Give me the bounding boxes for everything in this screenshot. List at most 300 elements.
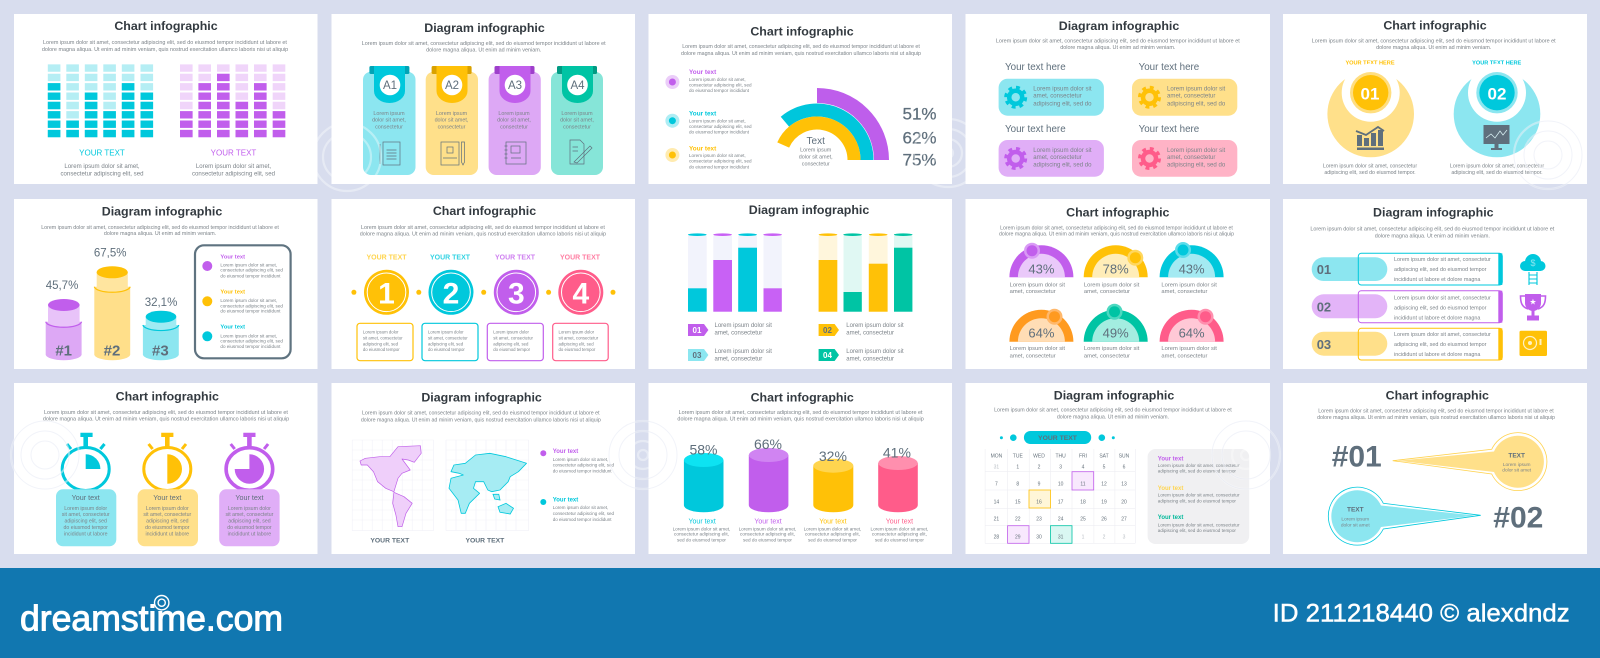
box: pink gear: amet, consectetur [1167,154,1215,161]
step 4: 4 [572,277,589,310]
intro text: dolore magna aliqua. Ut enim ad minim veniam, quis nostrud exercitation ullamco laboris nisi ut aliquip [42,47,288,53]
box: purple gear: Lorem ipsum dolor sit [1033,147,1092,154]
calendar header pill: YOUR TEXT [1038,435,1078,442]
circle 01: YOUR TEXT HERE [1345,60,1395,66]
step 2: do eiusmod tempor [428,347,465,352]
chart: left tubes [688,233,782,312]
cylinder 32%: 32% [819,448,847,464]
tag 01: Lorem ipsum dolor sit [714,323,772,329]
chart: cyan level bars [54,64,147,137]
intro text: Lorem ipsum dolor sit amet, consectetur adipiscing elit, sed do eiusmod tempor incididunt ut labore et [679,410,923,416]
stopwatch: cyan quarter [56,433,116,546]
chart: purple level bars [186,64,279,137]
stopwatch: yellow half: do eiusmod tempor [145,525,190,531]
card A3: Lorem ipsum [498,111,530,117]
legend box: Your text [220,289,245,295]
row 02: 02 [1317,300,1331,315]
notes box: Your text [1158,486,1183,492]
percent values: 51% [902,104,937,123]
calendar grid: 18 [1080,499,1086,505]
watermark spiral tint [11,121,1582,489]
tag 02: amet, consectetur [846,330,894,336]
calendar grid: 26 [1101,517,1107,523]
stopwatch: cyan quarter: adipiscing elit, sed [65,518,107,524]
calendar grid: 1 [1082,534,1085,540]
calendar grid: 8 [1016,482,1019,488]
legend item: cyan: consectetur adipiscing elit, sed [689,124,752,129]
intro text: dolore magna aliqua. Ut enim ad minim veniam, quis nostrud exercitation ullamco laboris nisi ut aliquip [1317,415,1555,421]
calendar grid: 3 [1123,534,1126,540]
intro text: Lorem ipsum dolor sit amet, consectetur adipiscing elit, sed do eiusmod tempor incididunt ut labore et [44,410,288,416]
watermark spirals [11,119,1582,489]
legend item: cyan [540,498,614,522]
card A4: Lorem ipsum [561,111,593,117]
calendar grid: 24 [1058,517,1064,523]
cylinder 58%: Your text [689,518,716,525]
calendar grid: WED [1033,454,1045,460]
intro text: dolore magna aliqua. Ut enim ad minim veniam. [104,231,216,237]
tag 03: amet, consectetur [714,357,762,363]
heading: Chart infographic [114,19,218,33]
gauge 64% orange: amet, consectetur [1010,354,1056,360]
icon: signed paper [570,140,592,164]
gauge 64% orange: 64% [1028,326,1055,341]
calendar grid: 13 [1121,482,1127,488]
callout: yellow: TEXT [1508,452,1525,459]
stopwatch: cyan quarter: sit amet, consectetur [62,512,110,518]
calendar grid: 2 [1103,534,1106,540]
row 01: adipiscing elit, sed do eiusmod tempor [1394,267,1487,273]
panel: world maps [332,383,635,554]
stopwatch: purple three quarters: incididunt ut labore [228,532,271,538]
label: purple chart: YOUR TEXT [211,149,256,158]
label: purple chart: Lorem ipsum dolor sit amet, [196,163,271,170]
circle 02: Lorem ipsum dolor sit amet, consectetur [1450,163,1544,169]
circle 02 [1450,60,1544,176]
panel: calendar [966,383,1270,554]
card A2: dolor sit amet, [435,118,469,124]
intro text: dolore magna aliqua. Ut enim ad minim veniam. [1375,233,1490,239]
tag 02: 02 [823,326,832,335]
calendar grid: 3 [1059,464,1062,470]
intro text: dolore magna aliqua. Ut enim ad minim veniam, quis nostrud exercitation ullamco laboris nisi ut aliquip [360,231,606,237]
gauge 49% teal: amet, consectetur [1084,354,1130,360]
card A2: Lorem ipsum [436,111,467,117]
intro text: dolore magna aliqua. Ut enim ad minim veniam. [1060,45,1176,51]
card A2 [426,66,478,175]
notes box: adipiscing elit, sed do eiusmod tempor [1158,469,1236,474]
cylinder #2: #2 [104,343,120,360]
stopwatch: yellow half: sit amet, consectetur [143,512,191,518]
step 2: adipiscing elit, sed [428,341,464,346]
stopwatch: purple three quarters: Lorem ipsum dolor [228,506,271,512]
intro text: Lorem ipsum dolor sit amet, consectetur adipiscing elit, sed do eiusmod tempor incididunt ut labore et [1000,225,1233,231]
legend item: yellow: Your text [689,146,717,153]
box: yellow gear [1132,62,1237,116]
panel: bar grid chart [14,14,318,184]
stopwatch: yellow half: incididunt ut labore [146,532,189,538]
legend item: yellow: Lorem ipsum dolor sit amet, [689,153,746,158]
tag 04: Lorem ipsum dolor sit [846,349,904,355]
heading: Diagram infographic [424,21,545,35]
cylinder 41%: 41% [883,445,911,461]
stopwatch: cyan quarter: incididunt ut labore [64,532,108,538]
calendar grid [985,449,1135,543]
circle 02: adipiscing elit, sed do eiusmod tempor. [1451,170,1543,176]
gauge 64% pink [1160,309,1224,360]
legend box: do eiusmod tempor incididunt [220,344,281,349]
tag 01: amet, consectetur [714,330,762,336]
stopwatch: purple three quarters [219,433,280,546]
calendar grid: 31 [994,464,999,470]
callout: cyan: TEXT [1347,507,1364,514]
legend item: cyan: Lorem ipsum dolor sit amet, [553,505,608,510]
legend item: cyan: do eiusmod tempor incididunt [689,129,750,134]
gauge 64% orange [1009,309,1073,360]
cylinder 66%: consectetur adipiscing elit, [740,532,795,537]
legend item: yellow [665,146,752,169]
label: cyan chart: YOUR TEXT [79,149,125,158]
calendar header pill [1000,431,1115,444]
notes box: adipiscing elit, sed do eiusmod tempor [1158,499,1236,504]
gauge 43% purple: 43% [1028,261,1055,276]
notes box: Lorem ipsum dolor sit amet, consectetur [1158,463,1240,468]
label: cyan chart: Lorem ipsum dolor sit amet, [64,163,140,170]
step 1: Lorem ipsum dolor [363,330,398,335]
heading: Chart infographic [1066,206,1170,220]
chart centre label: dolor sit amet, [799,155,833,161]
icon: trophy: ★ [1529,298,1537,306]
step 2 [422,254,478,361]
cylinder 66%: sed do eiusmod tempor [743,537,792,542]
stopwatch: cyan quarter: Lorem ipsum dolor [64,506,107,512]
cylinder 58%: consectetur adipiscing elit, [674,532,729,537]
calendar grid: 5 [1103,464,1106,470]
panel: pointer callouts [1283,383,1587,554]
notes box: Lorem ipsum dolor sit amet, consectetur [1158,522,1240,527]
calendar grid: SAT [1099,454,1109,460]
legend item: purple [665,69,752,93]
gauge 43% cyan: amet, consectetur [1161,289,1208,295]
row 03: Lorem ipsum dolor sit amet, consectetur [1394,332,1491,338]
legend item: purple: do eiusmod tempor incididunt [553,468,612,473]
stopwatch: purple three quarters: sit amet, consectetur [225,512,274,518]
callout: yellow: Lorem ipsum [1503,463,1531,468]
legend box: consectetur adipiscing elit, sed [220,268,283,273]
row 01: incididunt ut labore et dolore magna [1394,277,1481,283]
calendar grid: 16 [1036,499,1042,505]
legend box: Your text [220,254,245,260]
row 02: adipiscing elit, sed do eiusmod tempor [1394,305,1487,311]
gauge 64% pink: Lorem ipsum dolor sit [1161,346,1217,352]
heading: Diagram infographic [1054,388,1174,402]
calendar grid: MON [991,454,1003,460]
gauge 43% cyan: Lorem ipsum dolor sit [1161,282,1217,288]
callout: cyan: Lorem ipsum [1341,518,1369,523]
card A4 [551,66,603,175]
stopwatch: yellow half: adipiscing elit, sed [146,518,189,524]
gauge 78% yellow: 78% [1103,261,1129,276]
legend box: Your text [220,325,245,331]
panel: bookmark cards [332,14,635,184]
circle 01: Lorem ipsum dolor sit amet, consectetur [1323,163,1417,169]
calendar grid: 31 [1058,534,1064,540]
notes box [1148,449,1249,544]
box: pink gear: Lorem ipsum dolor sit [1167,147,1225,154]
calendar grid: 6 [1123,464,1126,470]
box: cyan gear: adipiscing elit, sed do [1033,100,1092,107]
box: yellow gear: amet, consectetur [1167,93,1215,100]
gauge 78% yellow [1084,245,1148,295]
calendar grid: 2 [1038,464,1041,470]
cylinder 41%: Lorem ipsum dolor sit amet, [870,526,928,531]
card A4: A4 [570,80,585,92]
card A2: A2 [445,80,459,92]
row 03: incididunt ut labore et dolore magna [1394,352,1481,358]
step 4: adipiscing elit, sed [558,341,594,346]
panel: semicircle gauges [966,199,1270,369]
tag 04: 04 [823,351,832,360]
legend box: Lorem ipsum dolor sit amet, [220,263,277,268]
gauge 43% cyan: 43% [1179,261,1205,276]
intro text: Lorem ipsum dolor sit amet, consectetur adipiscing elit, sed do eiusmod tempor incididunt ut labore et [1318,409,1554,415]
image id: ID 211218440 © alexdndz [1273,600,1570,628]
intro text: Lorem ipsum dolor sit amet, consectetur adipiscing elit, sed do eiusmod tempor incididunt ut labore et [682,44,920,50]
calendar grid: TUE [1013,454,1023,460]
intro text: Lorem ipsum dolor sit amet, consectetur adipiscing elit, sed do eiusmod tempor incididunt ut labore et [1312,39,1556,45]
calendar grid: 7 [995,482,998,488]
panel: numbered circles [1283,14,1587,184]
legend box: consectetur adipiscing elit, sed [220,303,283,308]
box: pink gear: adipiscing elit, sed do [1167,162,1226,168]
cylinder 41%: Your text [886,518,913,525]
gauge 49% teal: Lorem ipsum dolor sit [1084,346,1139,352]
percent values: 75% [902,151,937,170]
calendar grid: 17 [1058,499,1064,505]
heading: Diagram infographic [102,205,222,219]
tag 04 [819,349,904,363]
footer band [0,568,1600,658]
step 3: do eiusmod tempor [493,347,531,352]
cylinder 32%: Lorem ipsum dolor sit amet, [804,526,861,531]
connector dots [351,290,616,295]
card A3 [489,66,541,175]
legend item: purple: Your text [689,69,717,76]
label: cyan chart: consectetur adipiscing elit, sed [60,171,144,178]
step 2: YOUR TEXT [430,254,471,261]
percent values [902,104,937,170]
heading: Chart infographic [750,25,854,39]
tag 02: Lorem ipsum dolor sit [846,323,904,329]
cylinder 66% [739,436,796,542]
tag 03 [688,349,772,363]
heading: Diagram infographic [749,203,869,217]
calendar grid: 21 [994,517,999,523]
cylinder #3: 32,1% [145,297,177,309]
row 01: Lorem ipsum dolor sit amet, consectetur [1394,257,1491,263]
icon: trophy [1520,294,1546,320]
heading: Chart infographic [751,391,854,405]
panel: cylinder chart [648,383,952,554]
intro text: dolore magna aliqua. Ut enim ad minim veniam. [1057,414,1169,420]
calendar grid: 22 [1015,517,1021,523]
row 02: Lorem ipsum dolor sit amet, consectetur [1394,295,1491,301]
legend box [195,245,291,358]
card A4: consectetur [563,124,591,130]
row 03: 03 [1317,337,1331,352]
cylinder 41% [870,445,928,542]
cylinder 58%: 58% [689,441,718,457]
step 3: Lorem ipsum dolor [493,330,529,335]
box: yellow gear: Your text here [1139,62,1200,73]
notes box: Your text [1158,515,1183,521]
step 4: do eiusmod tempor [558,347,596,352]
box: pink gear: Your text here [1139,124,1200,135]
cylinder #1: #1 [55,343,72,360]
box: cyan gear: Lorem ipsum dolor sit [1033,86,1092,93]
circle 01: 01 [1361,84,1379,103]
gauge 49% teal: 49% [1103,326,1129,341]
card A3: A3 [508,80,522,92]
step 2: 2 [443,277,459,310]
label: cyan chart [60,149,144,178]
callout: cyan: dolor sit amet [1341,523,1370,529]
stopwatch: cyan quarter: Your text [72,493,100,502]
heading: Diagram infographic [1373,206,1494,220]
legend item: purple: do eiusmod tempor incididunt [689,88,750,93]
gauge 43% purple [1009,243,1073,295]
box: cyan gear [999,62,1104,116]
cylinder 58%: Lorem ipsum dolor sit amet, [673,526,730,531]
step 3 [487,254,543,361]
heading: Chart infographic [433,204,536,218]
cylinder #2 [94,248,130,360]
gauge 43% cyan [1160,242,1224,295]
legend item: purple [540,449,614,473]
cylinder #1: 45,7% [46,280,78,292]
legend item: cyan: consectetur adipiscing elit, sed [553,511,614,516]
legend box: Lorem ipsum dolor sit amet, [220,298,277,303]
cylinder 32% [804,448,861,542]
stopwatch: purple three quarters: adipiscing elit, sed [228,518,271,524]
number #01: #01 [1332,441,1382,474]
label: purple chart [192,149,275,178]
row 02: incididunt ut labore et dolore magna [1394,315,1481,321]
step 1: YOUR TEXT [366,254,407,261]
gauge 64% orange: Lorem ipsum dolor sit [1010,346,1065,352]
intro text: Lorem ipsum dolor sit amet, consectetur adipiscing elit, sed do eiusmod tempor incididunt ut labore et [361,225,605,231]
legend item: cyan: Lorem ipsum dolor sit amet, [689,119,746,124]
calendar grid: 28 [994,534,999,540]
panel: rainbow arc chart [648,14,952,184]
row 02 [1312,291,1502,323]
intro text: dolore magna aliqua. Ut enim ad minim veniam. [1376,45,1492,51]
map: Eurasia, Africa, Australia: YOUR TEXT [465,537,505,544]
cylinder #3 [143,297,179,360]
intro text: dolore magna aliqua. Ut enim ad minim veniam, quis nostrud exercitation ullamco laboris nisi ut aliquip [999,232,1234,238]
card A1: consectetur [375,124,403,130]
calendar grid: 27 [1121,517,1127,523]
heading: Chart infographic [116,390,219,404]
step 3: 3 [508,277,525,310]
legend item: cyan: Your text [553,498,578,504]
icon: planner [504,142,526,164]
panel: tube bar charts [648,199,952,369]
intro text: Lorem ipsum dolor sit amet, consectetur adipiscing elit, sed do eiusmod tempor incididunt ut labore et [41,225,279,231]
card A1 [363,66,416,175]
step 3: sit amet, consectetur [493,336,534,341]
intro text: dolore magna aliqua. Ut enim ad minim veniam, quis nostrud exercitation ullamco laboris nisi ut aliquip [677,417,924,423]
card A1: dolor sit amet, [372,118,406,124]
step 3: adipiscing elit, sed [493,341,529,346]
calendar grid: 19 [1101,499,1107,505]
card A4: dolor sit amet, [560,118,594,124]
heading: Diagram infographic [421,391,542,405]
tag 02 [819,323,904,336]
tag 01 [688,323,772,336]
box: cyan gear: amet, consectetur [1033,93,1082,100]
gauge 78% yellow: Lorem ipsum dolor sit [1084,282,1139,288]
tag 03: 03 [693,351,702,360]
legend box: do eiusmod tempor incididunt [220,309,281,314]
row 01 [1312,253,1502,285]
intro text: Lorem ipsum dolor sit amet, consectetur adipiscing elit, sed do eiusmod tempor incididunt ut labore et [362,41,606,47]
legend item: yellow: consectetur adipiscing elit, sed [689,159,752,164]
gauge 64% pink: amet, consectetur [1161,354,1208,360]
calendar grid: 29 [1015,534,1021,540]
calendar grid: 9 [1038,482,1041,488]
calendar grid: 20 [1121,499,1127,505]
cylinder 41%: consectetur adipiscing elit, [872,532,927,537]
intro text: dolore magna aliqua. Ut enim ad minim veniam, quis nostrud exercitation ullamco laboris nisi ut aliquip [681,51,921,57]
gauge 43% purple: Lorem ipsum dolor sit [1010,282,1065,288]
intro text: dolore magna aliqua. Ut enim ad minim veniam, quis nostrud exercitation ullamco laboris nisi ut aliquip [43,417,289,423]
heading: Chart infographic [1386,388,1489,402]
box: purple gear: amet, consectetur [1033,154,1082,161]
stopwatch: purple three quarters: Your text [235,493,263,502]
notes box: Your text [1158,456,1183,462]
legend box: do eiusmod tempor incididunt [220,273,281,278]
card A1: A1 [383,80,397,92]
legend item: purple: Lorem ipsum dolor sit amet, [689,77,746,82]
step 1: do eiusmod tempor [363,347,400,352]
icon: monitor with line chart [1484,125,1510,150]
gauge 43% purple: amet, consectetur [1010,289,1056,295]
box: purple gear [999,124,1104,177]
calendar grid: 1 [1016,464,1019,470]
cylinder 66%: Your text [754,518,782,525]
cylinder 58% [673,441,730,542]
callout: yellow [1393,433,1547,491]
circle 02: YOUR TEXT HERE [1472,60,1522,66]
step 4: sit amet, consectetur [558,336,599,341]
intro text: Lorem ipsum dolor sit amet, consectetur adipiscing elit, sed do eiusmod tempor incididunt ut labore et [994,408,1232,414]
cylinder 66%: Lorem ipsum dolor sit amet, [739,526,796,531]
cylinder #2: 67,5% [94,248,127,260]
step 2: Lorem ipsum dolor [428,330,464,335]
panel: stepped cylinders [14,199,318,369]
notes box: adipiscing elit, sed do eiusmod tempor [1158,528,1236,533]
box: purple gear: Your text here [1005,124,1066,135]
stopwatch: yellow half [138,433,198,546]
step 1 [357,254,413,361]
notes box: Lorem ipsum dolor sit amet, consectetur [1158,492,1240,497]
number #02: #02 [1493,501,1543,534]
step 1: adipiscing elit, sed [363,341,399,346]
gauge 78% yellow: amet, consectetur [1084,289,1130,295]
box: yellow gear: adipiscing elit, sed do [1167,100,1226,107]
chart centre label: consectetur [802,162,830,168]
